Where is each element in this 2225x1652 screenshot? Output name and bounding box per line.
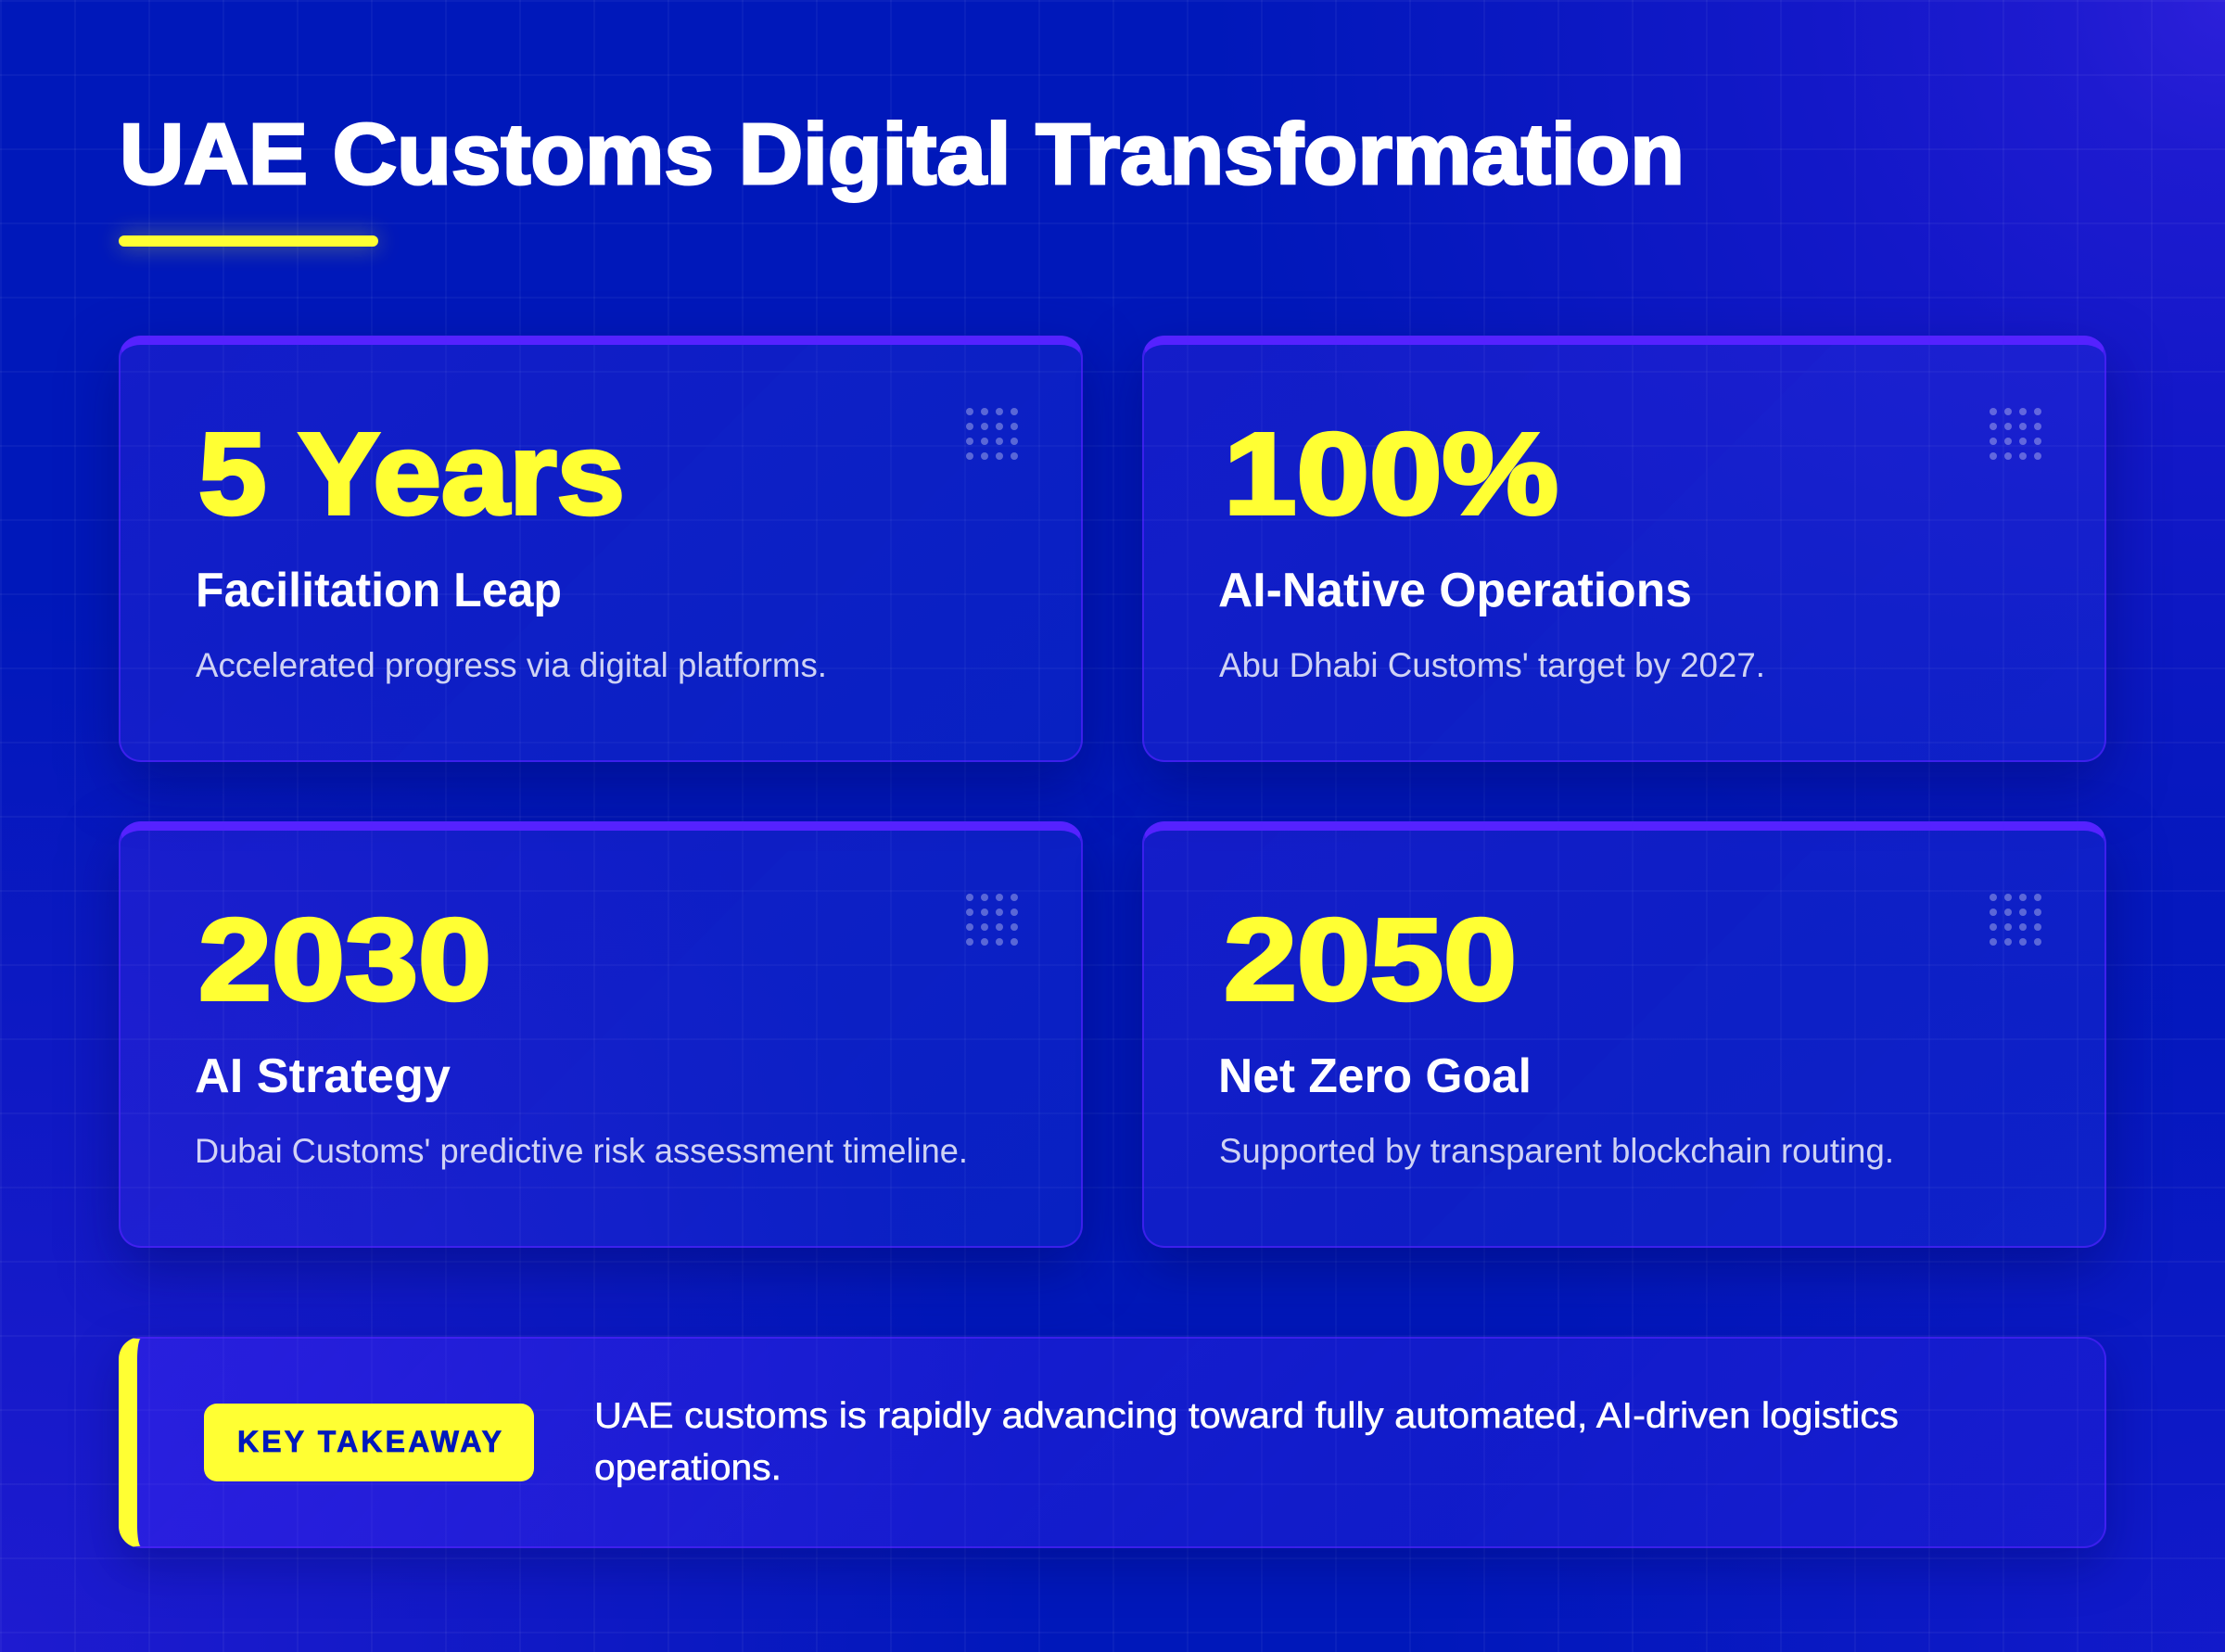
stat text: 100%: 100% [1224, 410, 1558, 539]
icon: dot grid [966, 894, 1018, 946]
title: UAE Customs Digital Transformation [120, 106, 1685, 202]
panel: 2050 [1142, 821, 2106, 1248]
stat text: 2030: Dubai Customs' predictive risk assessment timeline. [195, 1132, 968, 1170]
stat text: 2050: Supported by transparent blockchain routing. [1219, 1132, 1894, 1170]
stat text: 5 Years: 5 Years [198, 410, 625, 539]
icon: dot grid [1990, 408, 2041, 460]
badge: key takeaway [204, 1404, 534, 1481]
icon: dot grid [966, 408, 1018, 460]
badge: key takeaway: KEY TAKEAWAY [237, 1425, 502, 1458]
stat text: 5 Years: Accelerated progress via digital platforms. [196, 646, 827, 684]
stat text: 5 Years: Facilitation Leap [196, 564, 562, 617]
icon: dot grid [1990, 894, 2041, 946]
takeaway text: UAE customs is rapidly advancing toward fully automated, AI-driven logistics [594, 1396, 1899, 1436]
stat text: 100% [1218, 410, 1765, 684]
stat text: 2050: Net Zero Goal [1218, 1049, 1532, 1103]
stat text: 2030: 2030 [198, 896, 491, 1024]
takeaway text: operations. [594, 1448, 782, 1488]
stat text: 5 Years [196, 410, 827, 684]
panel: 5 Years [119, 336, 1083, 762]
panel: 100% [1142, 336, 2106, 762]
takeaway text [594, 1396, 1899, 1488]
stat text: 2050 [1218, 896, 1894, 1170]
stat text: 100%: Abu Dhabi Customs' target by 2027. [1219, 646, 1765, 684]
stat text: 2050: 2050 [1224, 896, 1517, 1024]
stat text: 2030: AI Strategy [195, 1049, 451, 1103]
stat text: 2030 [195, 896, 968, 1170]
stat text: 100%: AI-Native Operations [1218, 564, 1692, 617]
panel: 2030 [119, 821, 1083, 1248]
title underline [119, 235, 378, 247]
panel: key takeaway [119, 1337, 2106, 1548]
